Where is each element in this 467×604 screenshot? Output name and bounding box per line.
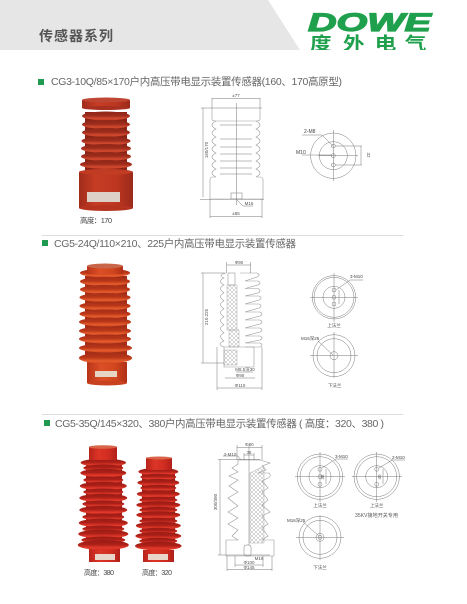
caption: height 380: 高度：380 — [84, 568, 114, 577]
technical drawing: CG5-35Q side view: Φ145 — [243, 565, 255, 570]
technical drawing: CG5-24Q upper flange: 3-M10 — [350, 274, 363, 279]
technical drawing: CG5-24Q lower flange — [301, 332, 358, 389]
technical drawing: CG5-24Q side view — [201, 260, 262, 390]
caption: height 170: 高度：170 — [80, 215, 112, 225]
technical drawing: CG5-24Q upper flange: 上法兰 — [327, 322, 341, 329]
technical drawing: CG5-35Q side view: M16 — [255, 556, 264, 561]
technical drawing: CG5-35Q side view — [213, 442, 274, 571]
product photo: CG5-24Q insulator — [79, 264, 132, 386]
section divider — [42, 414, 403, 415]
technical drawing: 35KV grounding switch flange — [352, 452, 405, 519]
technical drawing: CG5-35Q lower flange: M16深25 — [287, 517, 306, 524]
technical drawing: CG5-24Q side view: M8.5深30 — [235, 366, 255, 373]
technical drawing: CG5-24Q upper flange — [310, 273, 363, 329]
technical drawing: CG3-10Q top view: M10 — [296, 150, 306, 156]
technical drawing: CG3-10Q side view: 160/170 — [204, 141, 209, 158]
technical drawing: 35KV grounding switch flange: 40 — [377, 474, 382, 480]
technical drawing: CG5-24Q lower flange: 下法兰 — [328, 382, 342, 389]
product photo: CG5-35Q height 380 insulator — [78, 445, 129, 562]
brand logo: 度外电气 — [310, 34, 427, 55]
technical drawing: CG5-35Q side view: Φ100 — [243, 560, 255, 565]
technical drawing: CG5-24Q side view: Φ110 — [235, 383, 246, 388]
technical drawing: CG5-35Q upper flange — [295, 452, 348, 509]
technical drawing: CG5-35Q upper flange: 上法兰 — [313, 502, 327, 509]
technical drawing: CG5-35Q side view: 300/380 — [213, 493, 218, 510]
technical drawing: CG5-35Q upper flange: 3-M10 — [335, 454, 348, 459]
technical drawing: CG5-24Q side view: 210.225 — [204, 308, 209, 325]
technical drawing: CG5-35Q lower flange: 下法兰 — [313, 564, 327, 571]
technical drawing: CG3-10Q top view: 32 — [366, 152, 371, 158]
technical drawing: CG5-24Q lower flange: M16深25 — [301, 335, 320, 342]
section 2 heading: CG5-24Q/110×210、225户内高压带电显示装置传感器 — [54, 237, 296, 250]
section divider — [42, 235, 403, 236]
product photo: CG3-10Q insulator — [79, 98, 133, 211]
technical drawing: CG3-10Q side view: ±85 — [232, 211, 240, 216]
technical drawing: CG5-35Q side view: 36 — [246, 450, 252, 455]
header band — [0, 0, 300, 50]
technical drawing: CG5-35Q side view: Φ80 — [245, 442, 254, 447]
caption: height 320: 高度：320 — [142, 568, 172, 577]
technical drawing: 35KV grounding switch flange: 2-M10 — [392, 455, 405, 460]
technical drawing: CG5-35Q upper flange: 36 — [320, 474, 325, 480]
technical drawing: CG3-10Q side view: M16 — [245, 201, 254, 206]
technical drawing: CG5-35Q lower flange — [287, 515, 344, 571]
section 3 heading: CG5-35Q/145×320、380户内高压带电显示装置传感器 ( 高度：320、380 ) — [55, 417, 384, 430]
section 1 heading: CG3-10Q/85×170户内高压带电显示装置传感器(160、170高原型) — [51, 75, 342, 88]
page title: 传感器系列 — [39, 28, 113, 44]
brand logo — [308, 12, 434, 50]
technical drawing: CG5-35Q side view: 3-M10 — [224, 452, 237, 457]
technical drawing: CG5-24Q side view: Φ90 — [236, 373, 245, 378]
brand logo: DOWE — [308, 9, 433, 37]
technical drawing: CG3-10Q top view — [296, 129, 371, 181]
technical drawing: CG3-10Q top view: 2-M8 — [304, 129, 316, 135]
technical drawing: CG5-24Q side view: Φ90 — [235, 260, 244, 265]
technical drawing: CG3-10Q side view — [200, 93, 264, 218]
technical drawing: 35KV grounding switch flange: 上法兰 — [370, 502, 384, 509]
technical drawing: 35KV grounding switch flange: 35KV接地开关专用 — [355, 512, 398, 519]
product photo: CG5-35Q height 320 insulator — [135, 456, 182, 562]
technical drawing: CG3-10Q side view: ±77 — [232, 93, 240, 98]
